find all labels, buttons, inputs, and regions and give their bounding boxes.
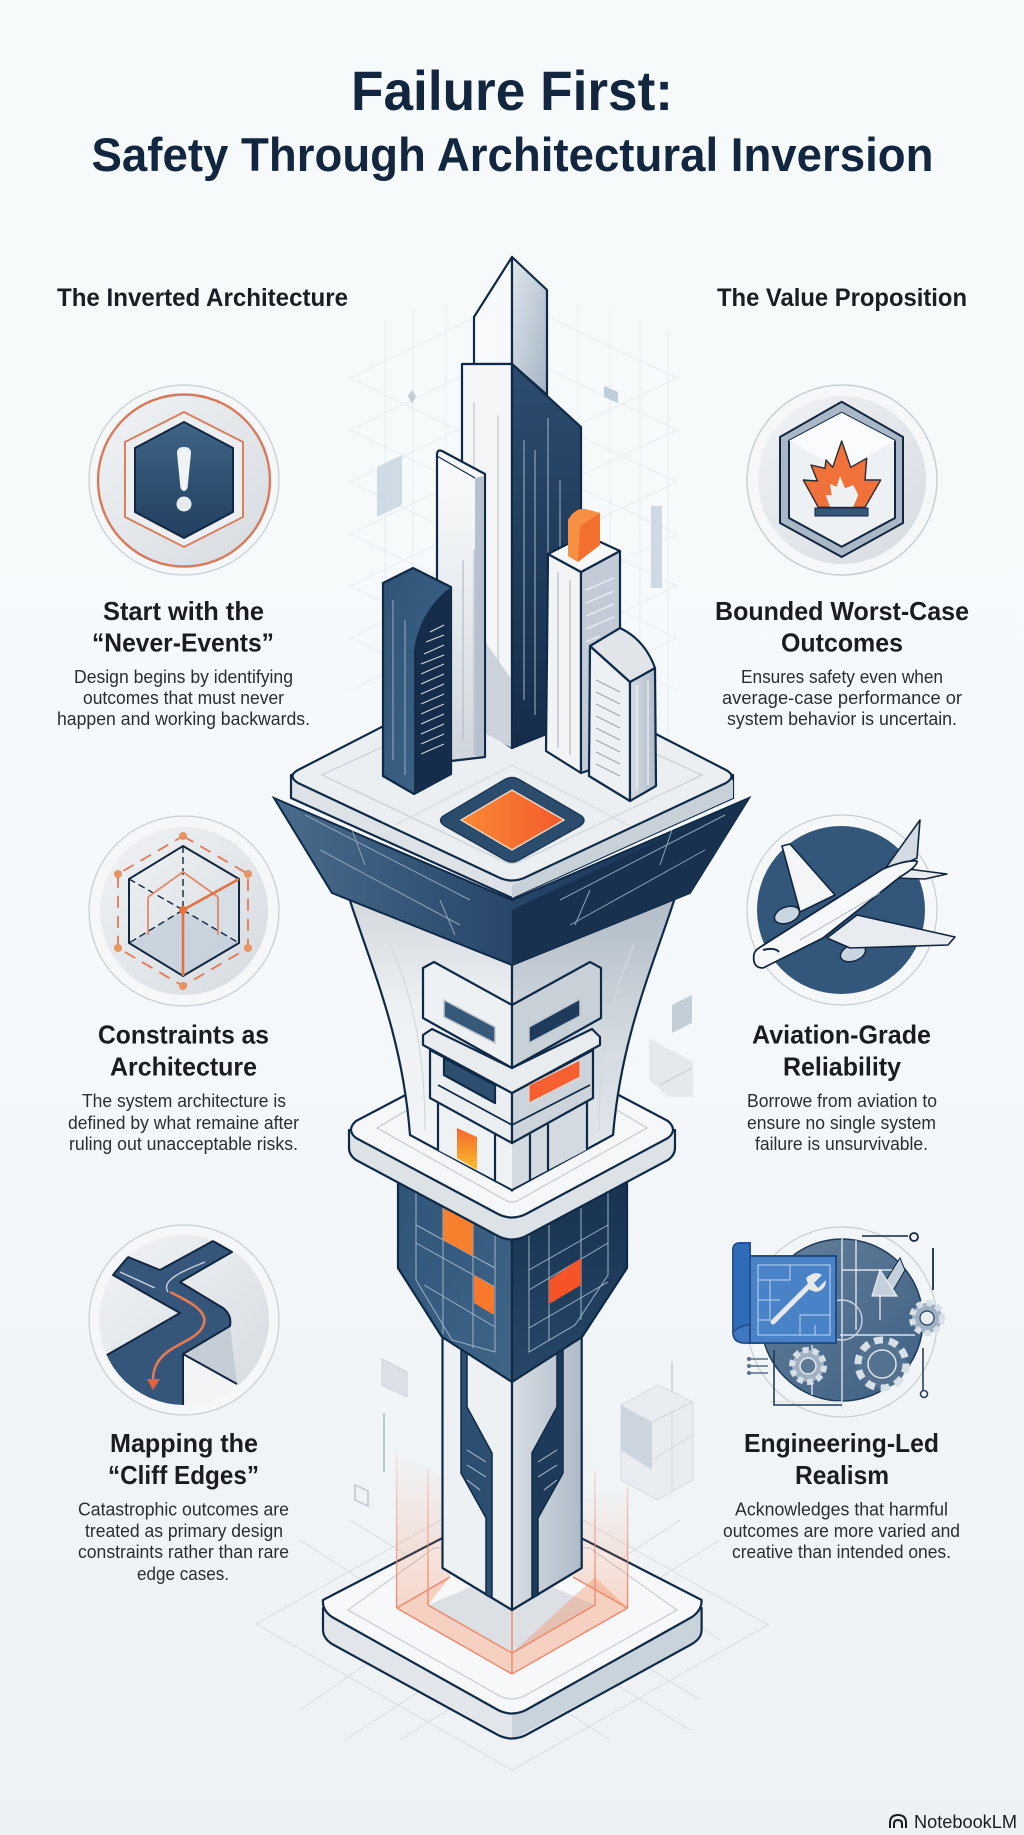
body text bbox=[57, 667, 310, 729]
orange core panel bbox=[440, 778, 584, 862]
window block upper bbox=[423, 962, 601, 1068]
card: constraints as architecture bbox=[68, 816, 299, 1154]
low curved tower right bbox=[589, 628, 656, 801]
title: Safety Through Architectural Inversion bbox=[92, 128, 934, 181]
icon: warning hexagon bbox=[89, 385, 279, 575]
slatted lower section with orange door bbox=[438, 1100, 587, 1189]
heading bbox=[108, 1428, 259, 1490]
card: engineering-led realism bbox=[723, 1227, 960, 1562]
central tower with spire bbox=[462, 257, 581, 748]
body text: creative than intended ones. bbox=[732, 1542, 951, 1562]
ledge band bbox=[423, 1029, 600, 1093]
body text: outcomes that must never bbox=[83, 688, 284, 708]
notebooklm watermark: NotebookLM bbox=[914, 1812, 1017, 1832]
body text: defined by what remaine after bbox=[68, 1113, 299, 1133]
body text bbox=[722, 667, 962, 729]
body text bbox=[78, 1500, 289, 1584]
dark curved tower left bbox=[383, 568, 451, 794]
heading: Bounded Worst-Case bbox=[715, 596, 969, 626]
heading: Outcomes bbox=[781, 628, 903, 658]
heading: “Never-Events” bbox=[92, 628, 274, 658]
orange failure boundary glow bbox=[397, 1453, 628, 1674]
window block lower bbox=[430, 1050, 593, 1143]
body text: edge cases. bbox=[137, 1564, 229, 1584]
body text: failure is unsurvivable. bbox=[755, 1134, 928, 1154]
heading: Start with the bbox=[103, 596, 264, 626]
body text: outcomes are more varied and bbox=[723, 1521, 960, 1541]
heading bbox=[744, 1428, 939, 1490]
body text: Ensures safety even when bbox=[741, 667, 943, 687]
heading: “Cliff Edges” bbox=[108, 1460, 259, 1490]
heading: Realism bbox=[795, 1460, 889, 1490]
icon: blueprint and gears bbox=[733, 1227, 942, 1417]
body text: The system architecture is bbox=[82, 1091, 286, 1111]
heading bbox=[98, 1020, 269, 1082]
card: start with the never-events bbox=[57, 385, 310, 729]
white tower right with orange cap bbox=[546, 509, 620, 773]
card: mapping the cliff edges bbox=[78, 1225, 289, 1584]
body text: treated as primary design bbox=[85, 1521, 283, 1541]
icon: cliff road bbox=[89, 1225, 279, 1420]
slab tower left bbox=[437, 450, 485, 761]
heading: Constraints as bbox=[98, 1020, 269, 1050]
heading: the value proposition: The Value Proposition bbox=[717, 284, 967, 312]
title bbox=[92, 59, 934, 181]
icon: airplane bbox=[747, 815, 955, 1005]
tower base plinth bbox=[323, 1538, 702, 1740]
mid platform bbox=[349, 1080, 675, 1240]
icon: contained explosion bbox=[747, 385, 937, 575]
body text bbox=[747, 1091, 937, 1154]
body text bbox=[68, 1091, 299, 1154]
heading: the inverted architecture: The Inverted Architecture bbox=[57, 284, 348, 312]
card: aviation-grade reliability bbox=[747, 815, 955, 1154]
heading bbox=[715, 596, 969, 658]
heading: Reliability bbox=[783, 1052, 902, 1082]
heading bbox=[92, 596, 274, 658]
support column bbox=[442, 1330, 582, 1610]
floating decorative blocks bbox=[355, 995, 693, 1506]
body text: system behavior is uncertain. bbox=[727, 709, 957, 729]
heading: Engineering-Led bbox=[744, 1428, 939, 1458]
dark grid block bbox=[398, 1170, 627, 1382]
body text: ruling out unacceptable risks. bbox=[69, 1134, 298, 1154]
body text: happen and working backwards. bbox=[57, 709, 310, 729]
body text: ensure no single system bbox=[747, 1113, 936, 1133]
body text: average-case performance or bbox=[722, 688, 962, 708]
flared cone neck bbox=[345, 885, 679, 1190]
body text bbox=[723, 1500, 960, 1562]
background blueprint grid behind towers bbox=[350, 300, 677, 735]
heading: Mapping the bbox=[110, 1428, 258, 1458]
heading: Aviation-Grade bbox=[752, 1020, 931, 1050]
card: bounded worst-case outcomes bbox=[715, 385, 969, 729]
dark platform cap bbox=[274, 798, 749, 965]
heading: Architecture bbox=[110, 1052, 257, 1082]
title: Failure First: bbox=[351, 59, 673, 122]
body text: Catastrophic outcomes are bbox=[78, 1500, 289, 1520]
body text: Acknowledges that harmful bbox=[735, 1500, 948, 1520]
top platform slab bbox=[291, 660, 733, 898]
icon: constraint hexagon bbox=[89, 816, 279, 1006]
floor grid bbox=[256, 1480, 768, 1770]
heading bbox=[752, 1020, 931, 1082]
body text: Design begins by identifying bbox=[74, 667, 293, 687]
body text: Borrowe from aviation to bbox=[747, 1091, 937, 1111]
body text: constraints rather than rare bbox=[78, 1542, 289, 1562]
